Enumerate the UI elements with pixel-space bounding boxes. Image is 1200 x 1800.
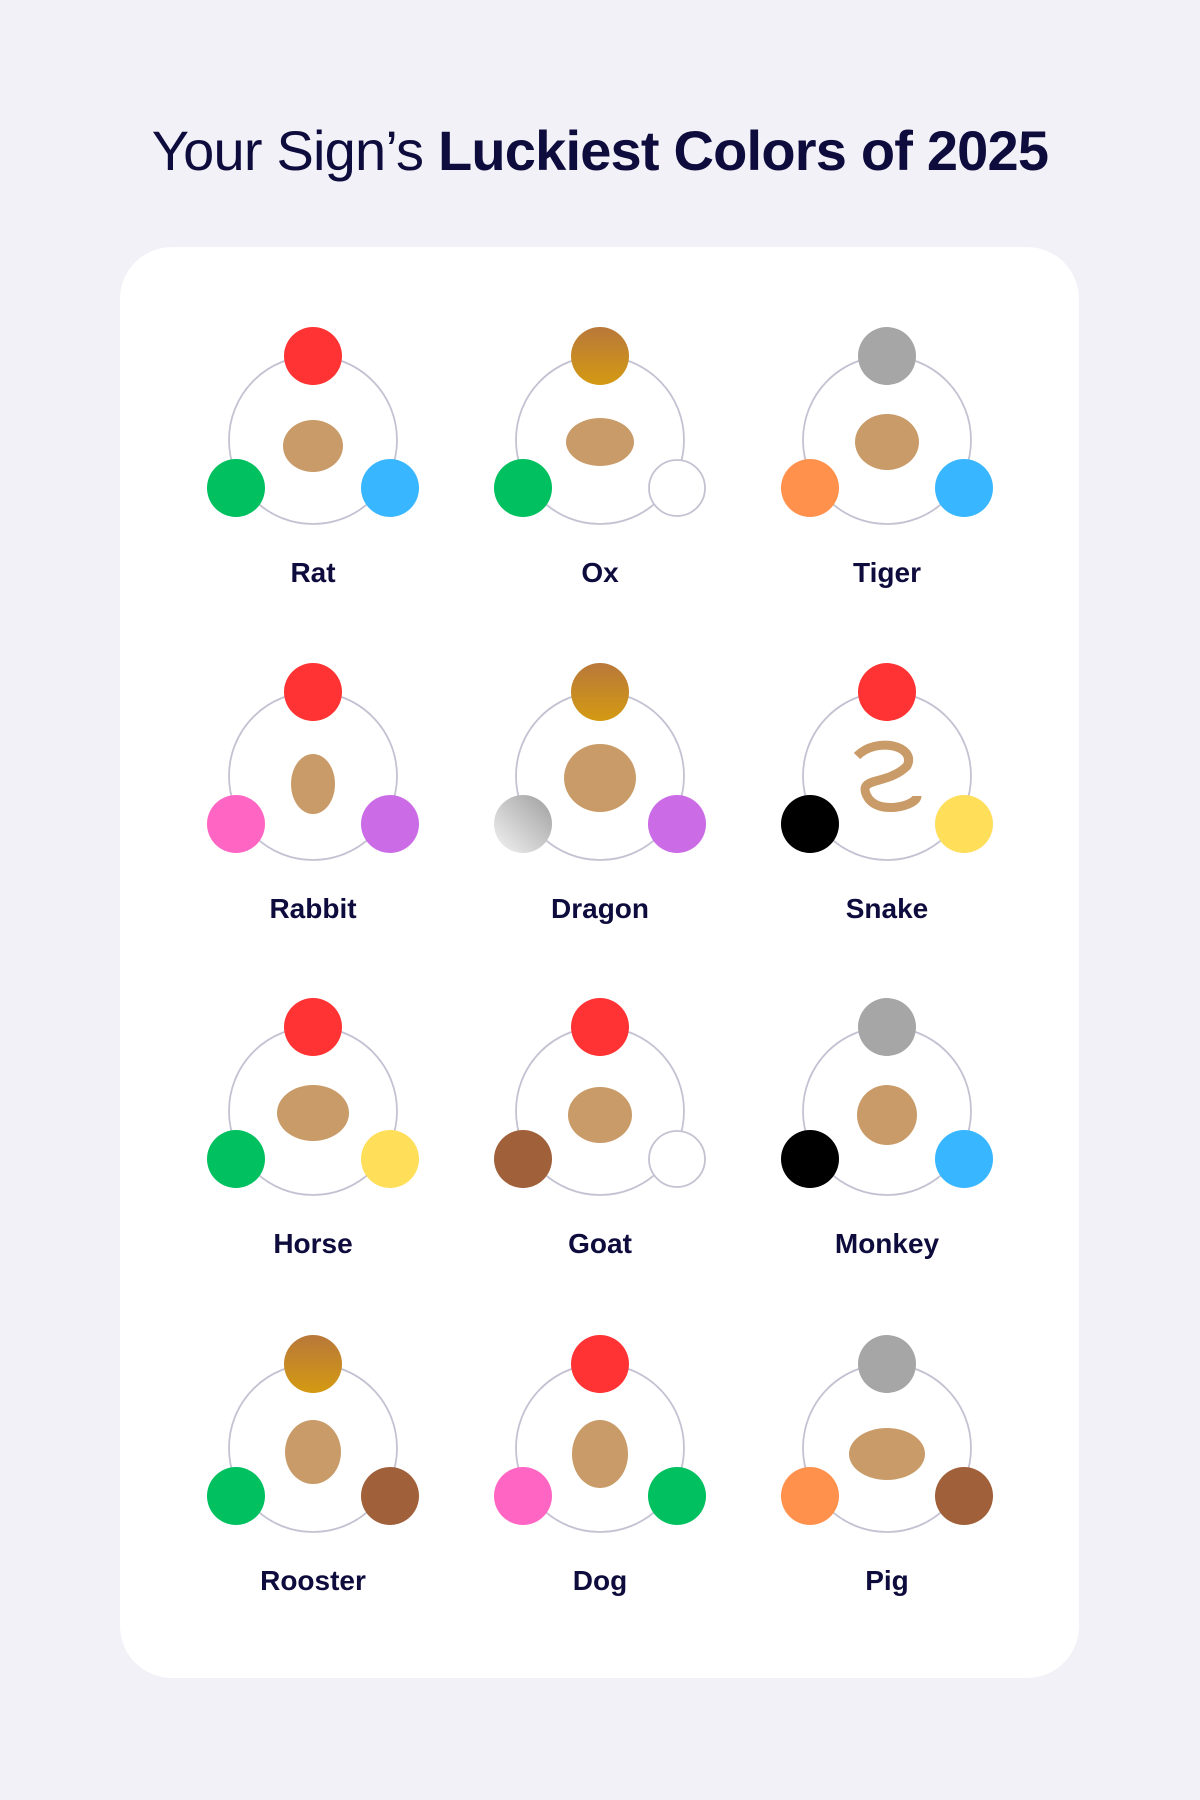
sign: Rat: Rat [290, 557, 336, 588]
sign: Pig: Pig [865, 1565, 909, 1596]
sign: Rooster: Rooster [260, 1565, 366, 1596]
sign: Tiger [781, 327, 993, 588]
sign: Rabbit: Rabbit [269, 893, 357, 924]
sign: Snake: Snake [846, 893, 928, 924]
sign: Dog [494, 1335, 706, 1596]
sign: Pig [781, 1335, 993, 1596]
sign: Monkey: Monkey [835, 1228, 940, 1259]
sign: Snake [781, 663, 993, 924]
sign: Rooster [207, 1335, 419, 1596]
sign: Dog: Dog [573, 1565, 627, 1596]
sign: Rat [207, 327, 419, 588]
sign: Rabbit [207, 663, 419, 924]
sign: Ox [494, 327, 705, 588]
sign: Monkey [781, 998, 993, 1259]
panel: card [120, 247, 1079, 1678]
sign: Dragon: Dragon [551, 893, 649, 924]
sign: Horse: Horse [273, 1228, 353, 1259]
sign: Dragon [494, 663, 706, 924]
sign: Tiger: Tiger [853, 557, 921, 588]
sign: Goat [494, 998, 705, 1259]
sign: Goat: Goat [568, 1228, 632, 1259]
title: Your Sign’s Luckiest Colors of 2025 [152, 119, 1048, 182]
sign: Ox: Ox [581, 557, 619, 588]
sign: Horse [207, 998, 419, 1259]
